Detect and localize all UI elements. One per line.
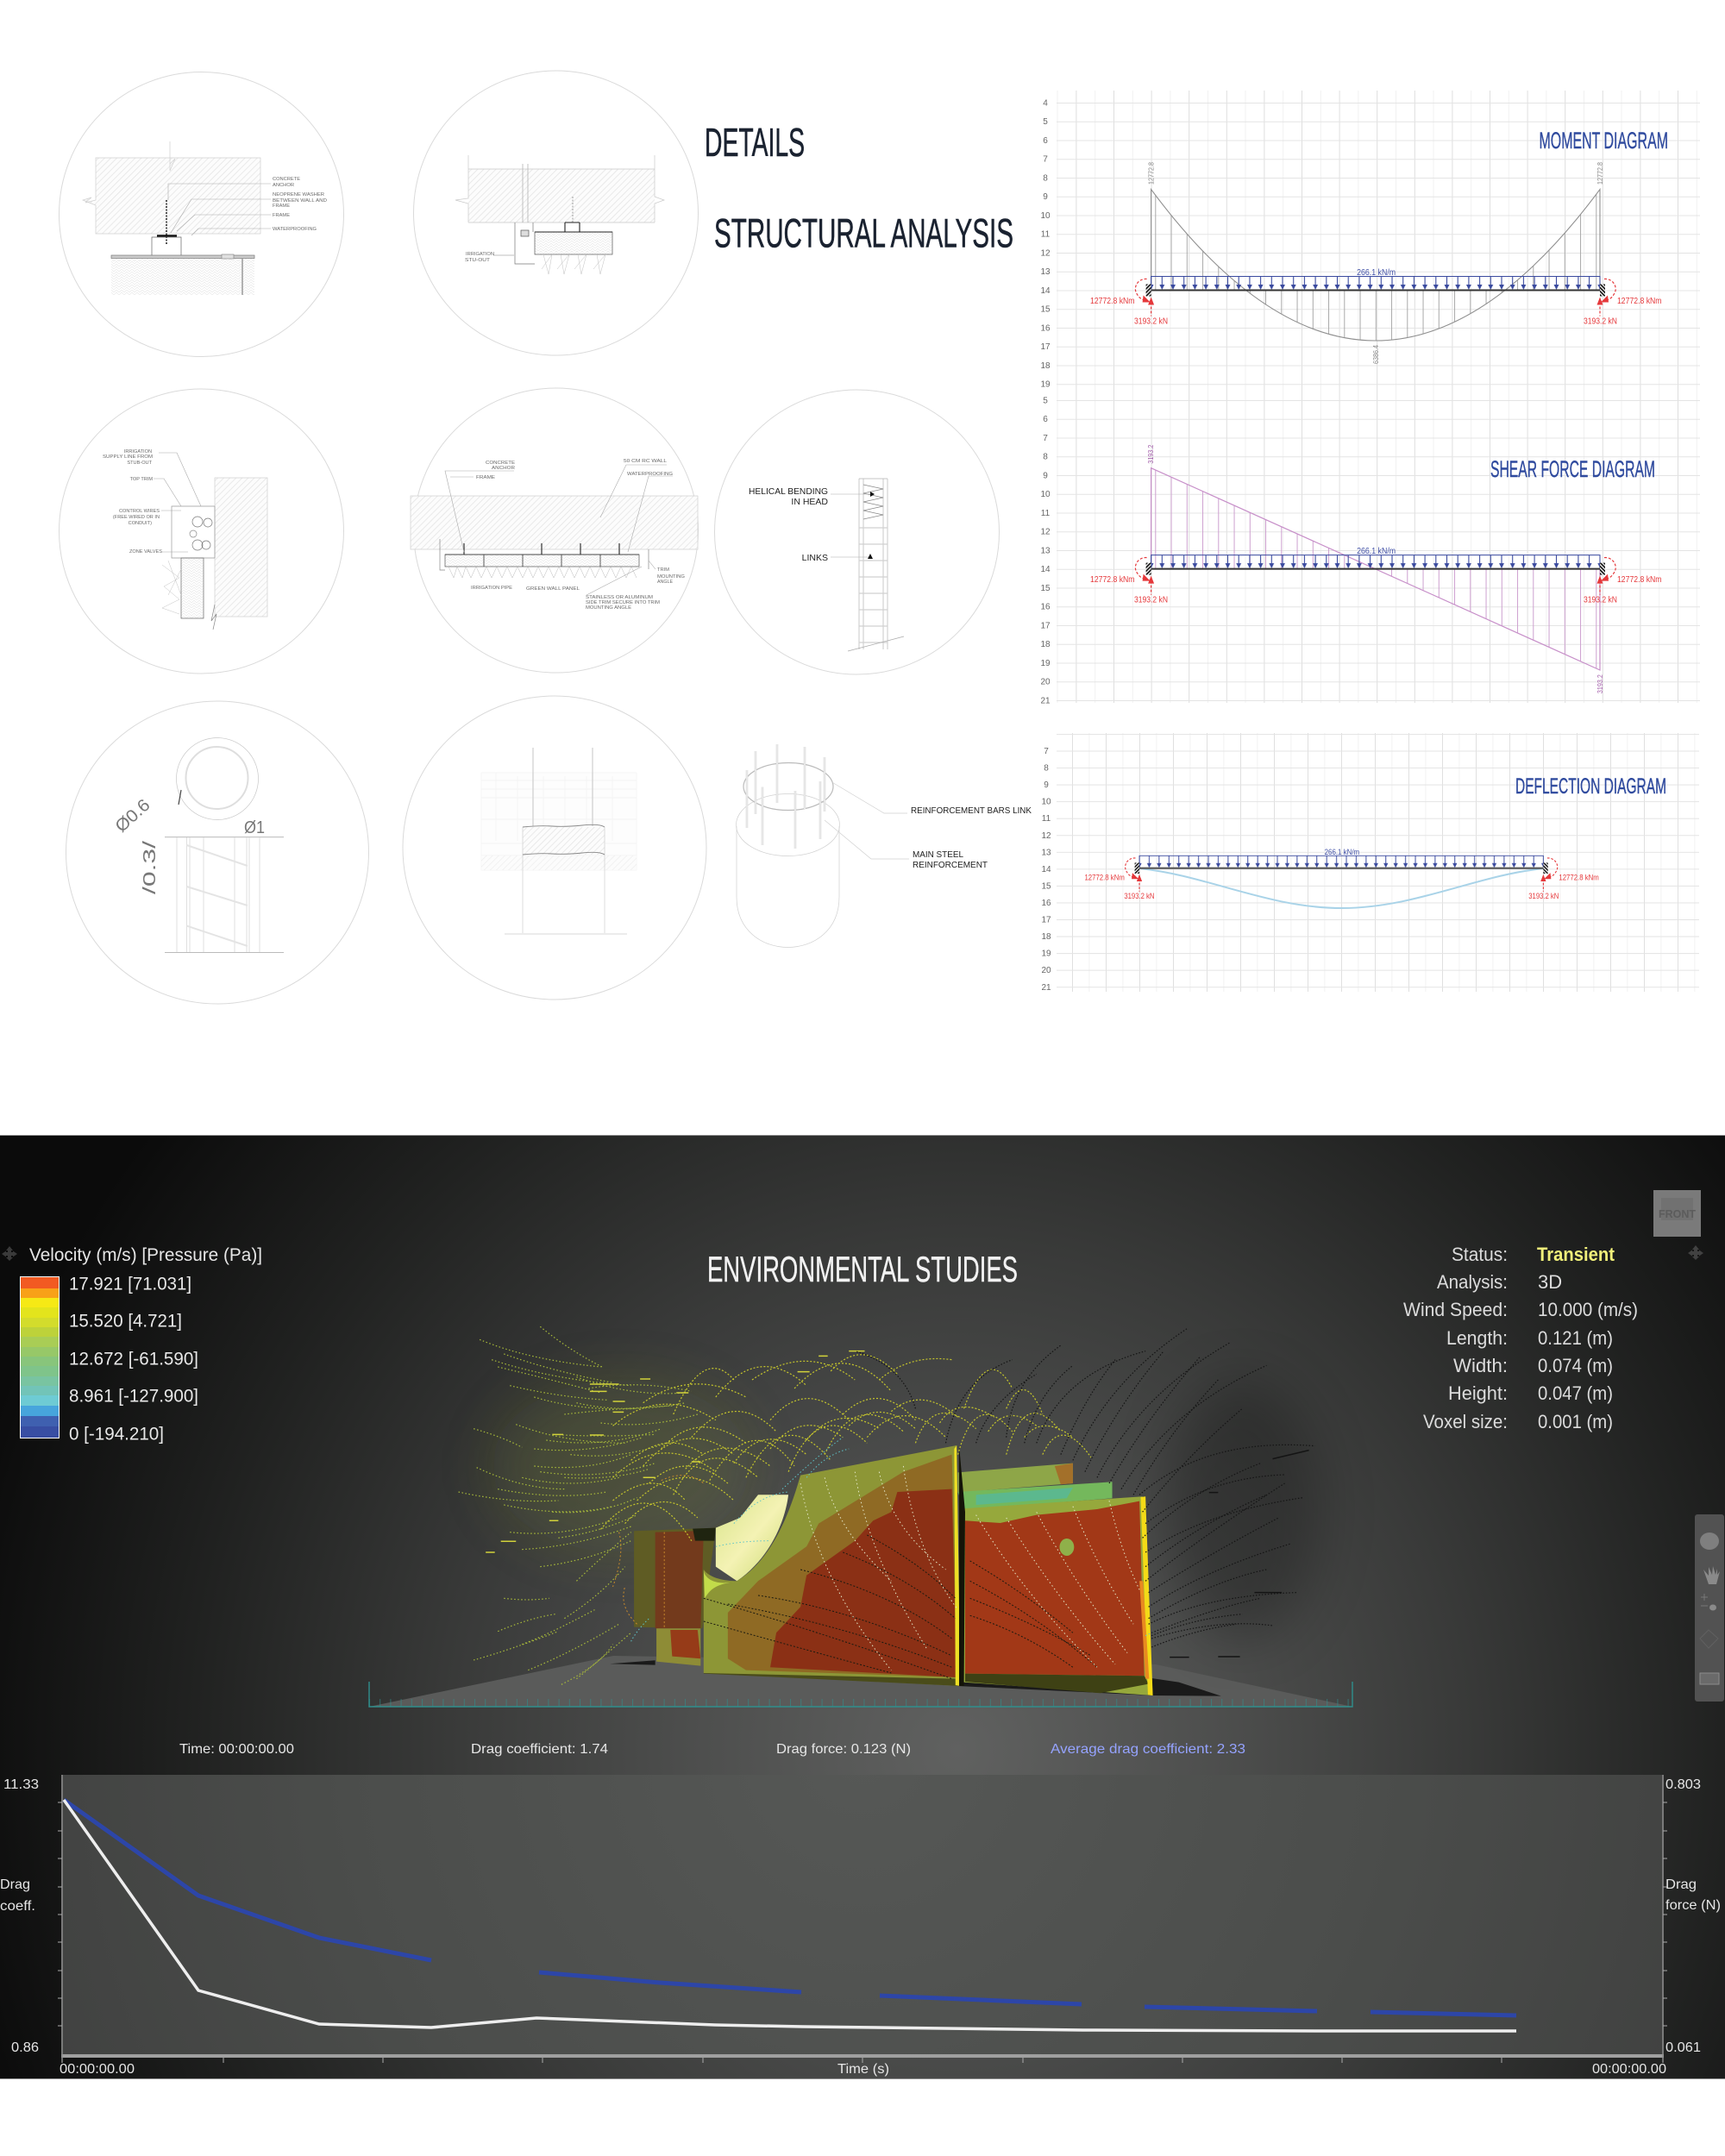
row numbers: moment grid: 16 (1040, 324, 1051, 333)
panel: deflection diagram (1041, 733, 1699, 993)
curved cream panel (716, 1495, 788, 1581)
back right panels (958, 1463, 1113, 1510)
row numbers: shear grid (1040, 397, 1051, 705)
row numbers: moment grid: 13 (1040, 267, 1051, 277)
values: 3193.2 kN (1584, 595, 1617, 605)
labels: detail 3: CONDUIT) (129, 521, 152, 526)
detail circle 1: wall anchor (59, 72, 343, 357)
values (1084, 848, 1599, 901)
dimension labels: column: /0.3/ (141, 840, 160, 894)
legend values: 12.672 [-61.590] (69, 1349, 198, 1369)
parameter labels: Width: (1453, 1355, 1508, 1376)
colour scale (20, 1276, 60, 1438)
view cube: front: FRONT (1659, 1208, 1696, 1220)
row numbers: moment grid: 6 (1043, 136, 1048, 146)
summary readouts: Average drag coefficient: 2.33 (1051, 1742, 1245, 1757)
labels: detail 2 (465, 252, 494, 263)
row numbers: deflection grid: 12 (1041, 831, 1051, 841)
row numbers: moment grid (1040, 98, 1051, 390)
parameter labels: Length: (1446, 1327, 1508, 1349)
parameter values: Transient (1537, 1244, 1615, 1265)
labels: detail 5: IN HEAD (791, 497, 828, 507)
panel: shear force diagram (1040, 390, 1700, 705)
chart axis labels: coeff. (0, 1899, 35, 1914)
info block: run parameters (1403, 1244, 1638, 1432)
row numbers: moment grid: 11 (1041, 230, 1051, 240)
chart axis labels: force (N) (1665, 1898, 1721, 1913)
summary readouts: Drag force: 0.123 (N) (776, 1742, 911, 1757)
row numbers: deflection grid: 13 (1041, 848, 1051, 857)
yellow arcs above model (601, 1355, 1091, 1541)
shadows (610, 1660, 1221, 1696)
row numbers: deflection grid: 11 (1042, 814, 1051, 824)
legend values: 8.961 [-127.900] (69, 1387, 198, 1406)
parameter values: 0.074 (m) (1538, 1355, 1613, 1376)
labels: detail 3 (103, 449, 162, 555)
values: 3193.2 kN (1124, 892, 1155, 901)
labels: detail 4: GREEN WALL PANEL (526, 586, 580, 592)
chart axis labels: 00:00:00.00 (60, 2062, 135, 2077)
streamline haze (492, 1380, 1320, 1639)
parameter labels (1403, 1244, 1508, 1432)
values: 12772.8 kNm (1617, 296, 1662, 306)
labels: detail 2: STU-OUT (465, 258, 491, 263)
beam and supports (1084, 848, 1599, 901)
row numbers: deflection grid: 9 (1044, 780, 1049, 790)
row numbers: shear grid: 17 (1040, 621, 1051, 631)
row numbers: moment grid: 5 (1043, 117, 1048, 127)
3D pile reinforcement (737, 744, 909, 947)
row numbers: shear grid: 16 (1040, 603, 1051, 612)
row numbers: shear grid: 21 (1040, 697, 1051, 705)
yellow-green streamlines left (459, 1326, 698, 1684)
row numbers: shear grid: 12 (1040, 528, 1051, 537)
icon: pan arrows (1700, 1630, 1718, 1648)
reactions right (1597, 558, 1615, 595)
icon: clapper (1700, 1673, 1719, 1684)
ground plane (369, 1656, 1352, 1707)
labels: pile reinforcement: MAIN STEEL (913, 849, 963, 860)
heading: structural analysis: STRUCTURAL ANALYSIS (714, 210, 1013, 255)
wind simulation: model and streamlines (369, 1326, 1352, 1707)
values: 266.1 kN/m (1357, 267, 1396, 278)
detail circle 4: green wall panel section (411, 388, 699, 673)
heading: details: DETAILS (705, 120, 805, 165)
row numbers: shear grid: 14 (1040, 565, 1051, 574)
parameter labels: Wind Speed: (1403, 1299, 1508, 1320)
parameter values: 10.000 (m/s) (1538, 1299, 1638, 1320)
labels: detail 1: NEOPRENE WASHER (273, 192, 324, 197)
base scale line (369, 1682, 1352, 1707)
row numbers: shear grid: 5 (1043, 397, 1048, 405)
parameter labels: Height: (1448, 1382, 1508, 1404)
legend values (69, 1275, 198, 1444)
legend: velocity and pressure (2, 1245, 262, 1444)
labels: detail 3: IRRIGATION (124, 449, 152, 454)
labels: detail 4: ANGLE (657, 580, 673, 585)
row numbers: moment grid: 19 (1040, 380, 1051, 390)
labels: detail 1: WATERPROOFING (273, 227, 317, 232)
icon: hand (1703, 1566, 1720, 1584)
row numbers: deflection grid: 14 (1041, 865, 1051, 874)
row numbers: moment grid: 8 (1043, 174, 1048, 183)
values: 12772.8 kNm (1090, 574, 1135, 585)
chart axis labels: 11.33 (3, 1777, 39, 1792)
labels: detail 4: WATERPROOFING (627, 472, 673, 477)
summary readouts: Drag coefficient: 1.74 (471, 1742, 608, 1757)
row numbers: shear grid: 15 (1040, 584, 1051, 593)
legend values: 0 [-194.210] (69, 1425, 164, 1444)
row numbers: shear grid: 13 (1040, 547, 1051, 555)
icon: orbit (1700, 1532, 1719, 1550)
values: 3193.2 kN (1528, 892, 1559, 901)
labels: detail 4: IRRIGATION PIPE (471, 586, 512, 591)
row numbers: moment grid: 18 (1040, 361, 1051, 371)
icon: zoom slider (1701, 1594, 1708, 1606)
row numbers: shear grid: 9 (1043, 471, 1048, 481)
values: 12772.8 (1148, 162, 1156, 185)
reactions left (1135, 558, 1154, 595)
values: 12772.8 kNm (1090, 296, 1135, 306)
icon: zoom dot (1709, 1604, 1716, 1611)
panel: environmental studies background (0, 1135, 1725, 2079)
reactions right (1540, 858, 1558, 892)
row numbers: moment grid: 7 (1043, 155, 1048, 165)
labels: detail 3: STUB-OUT (127, 461, 153, 466)
dark streamlines right (855, 1328, 1315, 1647)
labels: detail 5: LINKS (802, 553, 828, 563)
values: 12772.8 kNm (1559, 874, 1599, 883)
chart axis labels: 0.061 (1665, 2040, 1701, 2055)
labels: detail 3: ZONE VALVES (129, 549, 162, 555)
row numbers: shear grid: 6 (1043, 415, 1048, 424)
big central panel (704, 1445, 965, 1686)
labels: detail 4: MOUNTING ANGLE (586, 605, 631, 611)
row numbers: deflection grid: 17 (1041, 916, 1051, 924)
legend values: 17.921 [71.031] (69, 1275, 191, 1294)
axes and ticks (58, 1775, 1667, 2063)
row numbers: shear grid: 7 (1043, 434, 1048, 443)
reactions right (1597, 279, 1615, 316)
chart axis labels: Drag (1665, 1877, 1697, 1892)
row numbers: deflection grid: 15 (1041, 881, 1051, 892)
pale streaks on model (800, 1466, 1139, 1670)
values (1090, 444, 1662, 693)
labels: detail 1: BETWEEN WALL AND (273, 198, 327, 204)
parameter values: 0.121 (m) (1538, 1327, 1613, 1349)
model and streamlines (drawn in local coordinates) (459, 1326, 1315, 1696)
detail circle 5: helical bending and links (714, 390, 999, 674)
small left panels (634, 1528, 716, 1666)
deflection curve (1139, 868, 1544, 908)
navigation toolbar (1695, 1514, 1724, 1702)
parameter labels: Status: (1452, 1244, 1508, 1265)
values: 12772.8 kNm (1084, 874, 1125, 883)
summary readouts (179, 1742, 1245, 1757)
labels: detail 4 (471, 459, 685, 611)
row numbers: shear grid: 20 (1040, 678, 1051, 687)
values: 3193.2 (1147, 444, 1155, 464)
labels: detail 4: FRAME (476, 475, 495, 480)
labels: detail 1 (273, 177, 327, 232)
row numbers: shear grid: 10 (1040, 490, 1051, 499)
detail circle 2: irrigation stub-out (414, 71, 699, 355)
row numbers: moment grid: 12 (1040, 248, 1051, 259)
values: 266.1 kN/m (1325, 848, 1359, 857)
row numbers: moment grid: 10 (1040, 211, 1051, 221)
chart axis labels: Time (s) (837, 2062, 889, 2077)
dark streaks on model (704, 1535, 1097, 1679)
reactions left (1135, 279, 1154, 316)
series: drag coefficient (white) (64, 1800, 1516, 2031)
row numbers: moment grid: 17 (1040, 342, 1051, 352)
dimension labels: column: Ø0.6 (112, 796, 154, 837)
dimension labels: column: Ø1 (244, 818, 265, 837)
legend values: 15.520 [4.721] (69, 1311, 182, 1332)
detail circle 7: column base (403, 696, 706, 1000)
chart axis labels: 0.803 (1665, 1777, 1701, 1792)
labels: detail 1: ANCHOR (273, 183, 294, 188)
labels: detail 1: FRAME (273, 204, 290, 209)
chart axis labels: 0.86 (11, 2040, 39, 2055)
values: 3193.2 kN (1134, 316, 1168, 326)
labels: detail 4: CONCRETE (486, 461, 515, 466)
values (1090, 162, 1662, 364)
parameter labels: Voxel size: (1423, 1411, 1508, 1432)
row numbers: moment grid: 15 (1040, 305, 1051, 315)
summary readouts: Time: 00:00:00.00 (179, 1742, 294, 1757)
values: 12772.8 kNm (1617, 574, 1662, 585)
row numbers: deflection grid: 10 (1041, 798, 1051, 807)
cyan and orange traces (631, 1438, 1155, 1641)
icon: move handle (2, 1246, 17, 1261)
dimension labels: column (112, 796, 265, 894)
panel: details and structural drawings (59, 71, 1032, 1004)
icon: move handle right (1688, 1245, 1703, 1260)
chart axis labels: 00:00:00.00 (1592, 2062, 1666, 2077)
chart: drag over time (0, 1775, 1721, 2077)
labels: detail 3: SUPPLY LINE FROM (103, 454, 153, 460)
labels: detail 4: SIDE TRIM SECURE INTO TRIM (586, 600, 660, 605)
labels: detail 1: CONCRETE (273, 177, 300, 182)
view cube: front (1653, 1190, 1701, 1237)
beam and moment curve (1090, 162, 1661, 364)
labels: detail 2: IRRIGATION (466, 252, 494, 257)
labels: detail 5: HELICAL BENDING (749, 486, 828, 497)
labels: detail 4: MOUNTING (657, 574, 685, 580)
parameter labels: Analysis: (1437, 1271, 1508, 1293)
row numbers: moment grid: 9 (1043, 192, 1048, 202)
parameter values: 0.001 (m) (1538, 1411, 1613, 1432)
labels: pile reinforcement: REINFORCEMENT (913, 860, 988, 870)
row numbers: shear grid: 19 (1040, 659, 1051, 668)
row numbers: deflection grid: 8 (1044, 764, 1049, 773)
values: 266.1 kN/m (1357, 546, 1396, 556)
values: 6386.4 (1372, 345, 1380, 364)
parameter values: 3D (1538, 1271, 1562, 1293)
labels: detail 1: FRAME (273, 213, 290, 218)
detail circle 6: column section (66, 701, 369, 1004)
values: 3193.2 kN (1584, 316, 1617, 326)
row numbers: deflection grid: 21 (1041, 983, 1051, 993)
parameter values (1537, 1244, 1638, 1432)
labels: detail 3: CONTROL WIRES (119, 509, 160, 514)
row numbers: shear grid: 8 (1043, 453, 1048, 462)
values: 3193.2 (1596, 674, 1604, 693)
labels: pile reinforcement (911, 805, 1032, 870)
panel: moment diagram (1040, 91, 1700, 393)
labels: detail 4: TRIM (657, 567, 669, 573)
values: 3193.2 kN (1134, 595, 1168, 605)
row numbers: deflection grid: 16 (1041, 899, 1051, 908)
row numbers: moment grid: 14 (1040, 286, 1051, 296)
bright dashes (486, 1351, 864, 1552)
parameter values: 0.047 (m) (1538, 1382, 1613, 1404)
chart axis labels (0, 1777, 1721, 2077)
big right panel (963, 1496, 1153, 1695)
detail circle 3: control wires section (59, 389, 343, 674)
labels: detail 4: 50 CM RC WALL (624, 459, 667, 464)
chart axis labels: Drag (0, 1877, 30, 1892)
values: 12772.8 (1596, 162, 1604, 185)
labels: detail 3: TOP TRIM (130, 477, 153, 482)
row numbers: deflection grid: 20 (1041, 966, 1051, 975)
labels: pile reinforcement: REINFORCEMENT BARS LINK (911, 805, 1032, 816)
legend title: Velocity (m/s) [Pressure (Pa)] (29, 1245, 262, 1265)
labels: detail 4: ANCHOR (492, 466, 515, 471)
row numbers: shear grid: 18 (1040, 640, 1051, 649)
row numbers: deflection grid: 18 (1041, 932, 1051, 942)
row numbers: deflection grid (1041, 747, 1051, 993)
reactions left (1126, 858, 1142, 892)
series: average drag (blue) (64, 1800, 1516, 2015)
labels: detail 5 (749, 486, 828, 563)
beam and shear line (1090, 444, 1662, 693)
row numbers: deflection grid: 7 (1044, 747, 1049, 756)
labels: detail 3: (FREE WIRED OR IN (113, 515, 160, 520)
row numbers: deflection grid: 19 (1041, 950, 1051, 959)
row numbers: shear grid: 11 (1041, 509, 1051, 518)
labels: detail 4: STAINLESS OR ALUMINUM (586, 595, 653, 600)
heading: environmental studies: ENVIRONMENTAL STUDIES (707, 1249, 1018, 1289)
row numbers: moment grid: 4 (1043, 98, 1048, 109)
